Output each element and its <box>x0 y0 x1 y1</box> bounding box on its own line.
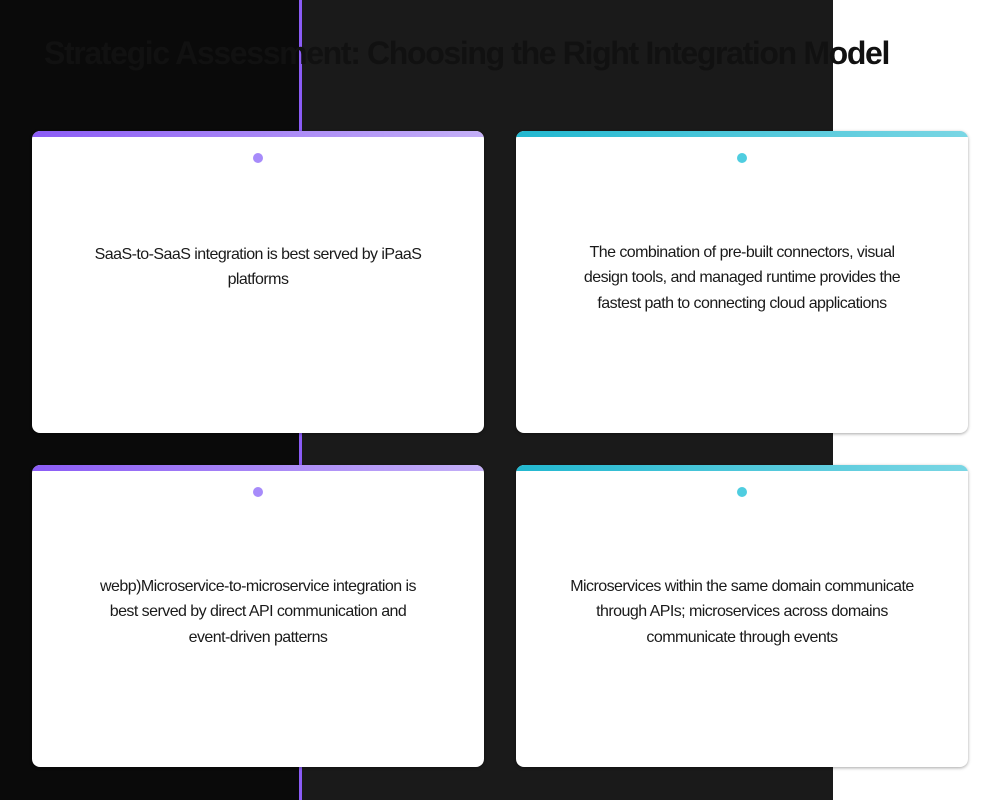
card: pre-built connectors: The combination of pre-built connectors, visual design tools, and managed runtime provides the fastest path to connecting cloud applications <box>584 244 900 312</box>
card: domains: Microservices within the same domain communicate through APIs; microservices across domains communicate through events <box>570 578 914 646</box>
title: Strategic Assessment: Choosing the Right Integration Model <box>44 35 889 71</box>
card: domains <box>516 465 968 767</box>
card: SaaS-to-SaaS: SaaS-to-SaaS integration is best served by iPaaS platforms <box>95 246 421 288</box>
card: microservice-to-microservice: webp)Microservice-to-microservice integration is best served by direct API communication and event-driven patterns <box>100 578 416 646</box>
card: pre-built connectors <box>516 131 968 433</box>
card: SaaS-to-SaaS <box>32 131 484 433</box>
card: microservice-to-microservice <box>32 465 484 767</box>
